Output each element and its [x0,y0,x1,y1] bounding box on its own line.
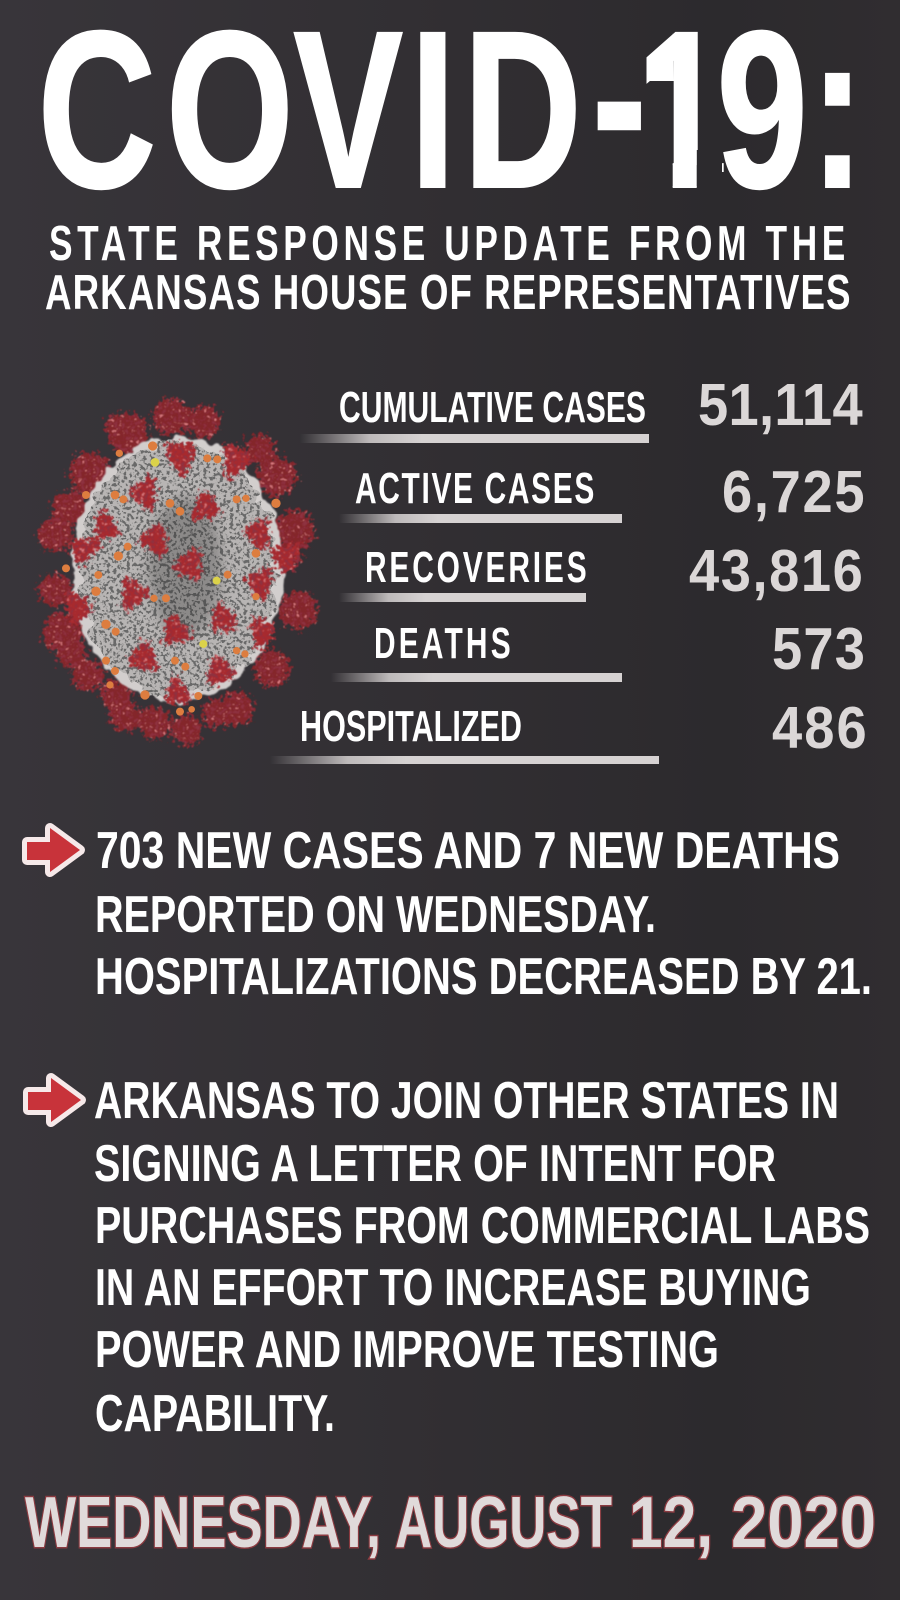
date footer [25,1483,876,1563]
stat row: active cases: 6,725 [722,460,865,526]
stat row: cumulative cases: 51,114 [698,373,863,439]
stat row: active cases [339,460,865,526]
text block: letter of intent: POWER AND IMPROVE TESTING [95,1321,719,1379]
title [44,30,850,190]
subtitle: STATE RESPONSE UPDATE FROM THE [49,216,845,271]
date footer: WEDNESDAY, [25,1483,381,1563]
stat row: hospitalized: 486 [772,696,867,762]
stat row: recoveries: RECOVERIES [365,542,587,591]
stat row: recoveries: 43,816 [689,539,863,605]
icon: red arrow 1 [27,828,80,872]
stat row: recoveries [339,539,863,605]
subtitle [45,216,850,320]
stat row: deaths [331,617,865,683]
stat row: deaths: DEATHS [374,618,511,667]
stat row: cumulative cases: CUMULATIVE CASES [339,383,646,432]
stat row: cumulative cases [300,373,863,443]
date footer: AUGUST [395,1483,612,1563]
date footer: 12, [629,1483,713,1563]
date footer: 2020 [731,1483,876,1563]
text block: letter of intent [94,1072,870,1443]
icon: coronavirus illustration [39,398,317,745]
stat row: deaths: 573 [772,617,865,683]
icon: red arrow 2 [28,1078,81,1122]
text block: new cases: REPORTED ON WEDNESDAY. [95,886,656,944]
text block: letter of intent: CAPABILITY. [95,1385,335,1443]
subtitle: ARKANSAS HOUSE OF REPRESENTATIVES [45,266,850,320]
stat row: active cases: ACTIVE CASES [355,463,594,512]
text block: new cases [95,822,872,1006]
stat row: hospitalized [270,696,867,764]
stat row: hospitalized: HOSPITALIZED [300,702,522,751]
